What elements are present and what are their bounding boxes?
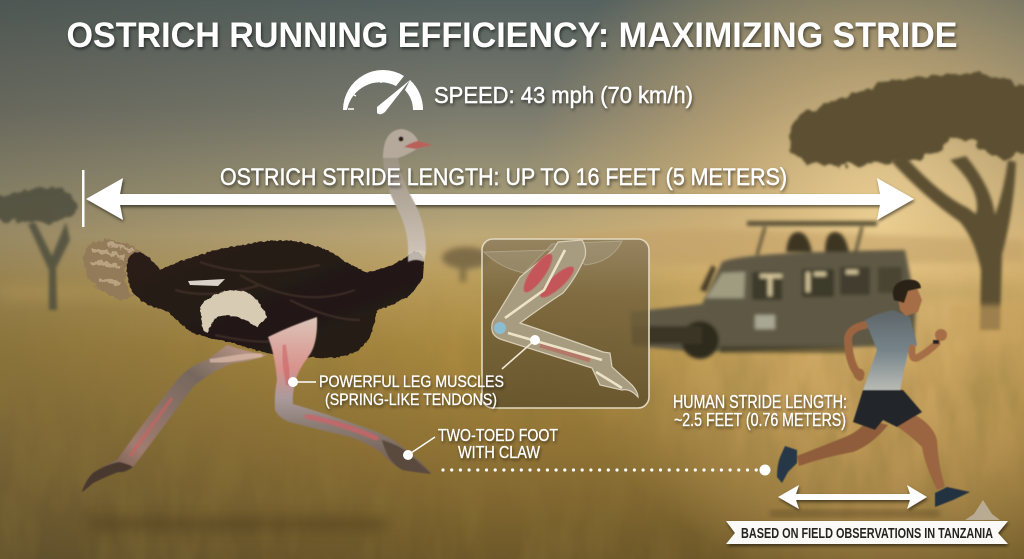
callout: powerful leg muscles: POWERFUL LEG MUSCLES [319, 372, 504, 391]
inset: knee joint [494, 322, 506, 334]
background: safari vehicle [630, 221, 916, 359]
inset panel: leg anatomy [482, 239, 649, 408]
runner rear arm [848, 325, 865, 377]
runner front arm [912, 343, 937, 358]
ostrich head [383, 129, 433, 158]
ostrich [82, 129, 433, 492]
ostrich tail feathers [82, 240, 140, 300]
ostrich white wing feathers [200, 290, 267, 333]
stride start marker [82, 170, 84, 227]
ostrich foot [382, 440, 431, 474]
haze at the base of the right acacia [950, 305, 1024, 341]
human stride label: HUMAN STRIDE LENGTH: [673, 392, 847, 412]
ostrich stride label: OSTRICH STRIDE LENGTH: UP TO 16 FEET (5 METERS) [220, 164, 787, 191]
dotted comparison line [443, 464, 770, 476]
inset: muscles [519, 250, 578, 302]
title: OSTRICH RUNNING EFFICIENCY: MAXIMIZING STRIDE [66, 16, 958, 55]
icon: tent marker [965, 500, 1000, 520]
arrow: human stride [778, 485, 927, 509]
runner head [897, 288, 922, 316]
arrow: ostrich stride length [86, 178, 914, 220]
inset: leg bones and outline [492, 240, 638, 397]
human stride label: ~2.5 FEET (0.76 METERS) [674, 410, 846, 430]
inset: bird body outline [484, 241, 622, 273]
runner rear leg [797, 420, 888, 466]
callout: inset pointer [502, 335, 540, 369]
callout: two-toed foot: TWO-TOED FOOT [438, 425, 558, 445]
inset: tendon [540, 345, 590, 360]
runner front leg [895, 415, 945, 490]
human stride label [673, 392, 847, 430]
background tree: right acacia [790, 73, 1024, 330]
ostrich back foot [82, 462, 133, 492]
ostrich neck base collar [408, 250, 426, 262]
callout: powerful leg muscles: (SPRING-LIKE TENDONS) [325, 390, 497, 409]
runner shorts [853, 390, 922, 430]
ostrich front leg [268, 317, 431, 473]
ostrich neck [383, 155, 426, 254]
speed label: SPEED: 43 mph (70 km/h) [434, 82, 693, 108]
runner front shoe [935, 487, 970, 507]
banner: source note [726, 521, 1008, 544]
runner [777, 280, 970, 507]
background tree: left acacia [0, 188, 76, 310]
background tree: distant small acacia [442, 247, 490, 282]
runner back shoe [777, 446, 797, 483]
ostrich body plumage [127, 241, 424, 358]
icon: speedometer [343, 70, 423, 114]
runner shirt [863, 310, 917, 390]
callout: powerful leg muscles [288, 372, 504, 409]
ostrich back leg [82, 345, 267, 492]
callout: two-toed foot: WITH CLAW [458, 442, 540, 462]
callout: two-toed foot [403, 425, 558, 462]
ostrich leg muscle highlight [283, 345, 289, 385]
ostrich feather texture [175, 262, 360, 342]
